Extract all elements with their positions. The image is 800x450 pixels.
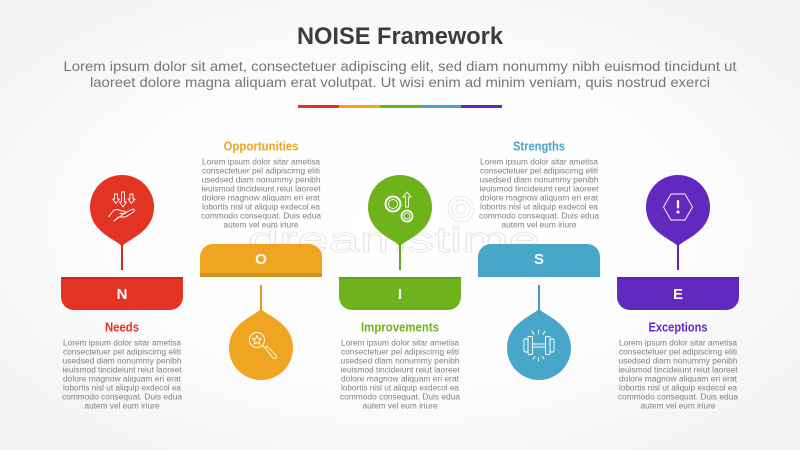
heading: Needs: Needs xyxy=(105,320,139,334)
band: O xyxy=(200,244,322,277)
heading: Strengths: Strengths xyxy=(513,140,565,154)
body text: Opportunities: usedsed diam nonummy penibh xyxy=(202,176,320,184)
heading: Exceptions: Exceptions xyxy=(648,320,708,334)
body text: Exceptions: autem vel eum iriure xyxy=(640,402,716,410)
body text: Needs: consectetuer pel adipiscirng eliti xyxy=(63,348,181,356)
title: NOISE Framework xyxy=(297,23,504,50)
letter: E: E xyxy=(673,286,683,303)
pin stem: I xyxy=(399,243,401,270)
body text: Needs xyxy=(62,338,183,410)
letter: S: S xyxy=(534,251,544,268)
column: Improvements xyxy=(339,175,461,410)
icon: hexagon warning xyxy=(664,194,692,220)
letter: O: O xyxy=(255,251,267,268)
heading: Opportunities: Opportunities xyxy=(224,140,299,154)
body text: Improvements: usedsed diam nonummy penibh xyxy=(340,356,460,366)
body text: Strengths: Lorem ipsum dolor sitar ametisa xyxy=(480,158,599,166)
body text: Strengths: ieuismod tincideiunt reiut laoreet xyxy=(480,184,599,194)
body text: Opportunities xyxy=(201,158,322,230)
pin stem: N xyxy=(121,243,123,270)
pin: N xyxy=(90,175,154,246)
rainbow divider xyxy=(298,105,502,108)
letter: I: I xyxy=(398,286,402,303)
body text: Strengths: autem vel eum iriure xyxy=(502,220,577,230)
body text: Exceptions: usedsed diam nonummy penibh xyxy=(618,356,738,366)
body text: Exceptions: consectetuer pel adipiscirng eliti xyxy=(619,348,737,356)
body text: Opportunities: commodo consequat. Duis edua xyxy=(201,212,322,220)
body text: Exceptions xyxy=(618,338,739,410)
pin: O xyxy=(229,309,293,380)
body text: Needs: Lorem ipsum dolor sitar ametisa xyxy=(63,338,182,348)
watermark: dreamstime xyxy=(248,219,540,260)
pin: S xyxy=(507,309,571,380)
body text: Exceptions: lobortis nisl ut aliquip exdecol ea xyxy=(619,384,738,392)
body text: Improvements: Lorem ipsum dolor sitar ametisa xyxy=(341,338,460,348)
subtitle text: Lorem ipsum dolor sit amet, consectetuer adipiscing elit, sed diam nonummy nibh euismod tincidunt ut xyxy=(64,58,737,74)
body text: Needs: dolore magnow aliquam eri erat xyxy=(63,374,182,384)
pin: I xyxy=(368,175,432,246)
icon: gears with arrow xyxy=(386,192,412,222)
body text: Improvements: commodo consequat. Duis edua xyxy=(340,392,461,402)
column: Strengths xyxy=(478,140,600,380)
body text: Opportunities: lobortis nisl ut aliquip exdecol ea xyxy=(202,202,321,212)
body text: Improvements xyxy=(340,338,461,410)
body text: Opportunities: ieuismod tincideiunt reiut laoreet xyxy=(202,184,321,194)
body text: Opportunities: Lorem ipsum dolor sitar ametisa xyxy=(202,158,321,166)
body text: Strengths: usedsed diam nonummy penibh xyxy=(480,176,598,184)
icon: magnifier with star xyxy=(250,332,276,359)
body text: Strengths: dolore magnow aliquam eri erat xyxy=(480,194,599,202)
body text: Strengths: consectetuer pel adipiscirng eliti xyxy=(480,166,598,176)
band: S xyxy=(478,244,600,277)
pin stem: E xyxy=(677,243,679,270)
body text: Improvements: ieuismod tincideiunt reiut laoreet xyxy=(340,366,460,374)
body text: Needs: ieuismod tincideiunt reiut laoreet xyxy=(62,366,182,374)
column: Exceptions xyxy=(617,175,739,410)
pin: E xyxy=(646,175,710,246)
body text: Needs: lobortis nisl ut aliquip exdecol ea xyxy=(63,384,182,392)
body text: Needs: commodo consequat. Duis edua xyxy=(62,392,183,402)
body text: Strengths: commodo consequat. Duis edua xyxy=(479,212,600,220)
body text: Exceptions: Lorem ipsum dolor sitar ametisa xyxy=(619,338,738,348)
column: Opportunities xyxy=(200,140,322,380)
body text: Improvements: dolore magnow aliquam eri erat xyxy=(341,374,460,384)
watermark xyxy=(248,196,540,260)
body text: Exceptions: ieuismod tincideiunt reiut laoreet xyxy=(618,366,738,374)
band: I xyxy=(339,277,461,310)
body text: Strengths xyxy=(479,158,600,230)
column: Needs xyxy=(61,175,183,410)
letter: N: N xyxy=(117,286,127,303)
icon: hand with down arrows xyxy=(109,192,135,221)
body text: Needs: autem vel eum iriure xyxy=(84,402,160,410)
body text: Needs: usedsed diam nonummy penibh xyxy=(62,356,182,366)
subtitle text: laoreet dolore magna aliquam erat volutpat. Ut wisi enim ad minim veniam, quis nostrud exerci xyxy=(90,74,710,90)
body text: Improvements: lobortis nisl ut aliquip exdecol ea xyxy=(341,384,460,392)
heading: Improvements: Improvements xyxy=(361,320,439,334)
pin stem: O xyxy=(260,285,262,312)
body text: Strengths: lobortis nisl ut aliquip exdecol ea xyxy=(480,202,599,212)
body text: Opportunities: autem vel eum iriure xyxy=(224,220,299,230)
body text: Exceptions: commodo consequat. Duis edua xyxy=(618,392,739,402)
icon: dumbbell xyxy=(524,330,554,361)
body text: Improvements: autem vel eum iriure xyxy=(362,402,438,410)
body text: Opportunities: consectetuer pel adipiscirng eliti xyxy=(202,166,320,176)
body text: Exceptions: dolore magnow aliquam eri erat xyxy=(619,374,738,384)
band: E xyxy=(617,277,739,310)
band: N xyxy=(61,277,183,310)
pin stem: S xyxy=(538,285,540,312)
subtitle text xyxy=(64,58,737,90)
body text: Opportunities: dolore magnow aliquam eri erat xyxy=(202,194,321,202)
body text: Improvements: consectetuer pel adipiscirng eliti xyxy=(341,348,459,356)
